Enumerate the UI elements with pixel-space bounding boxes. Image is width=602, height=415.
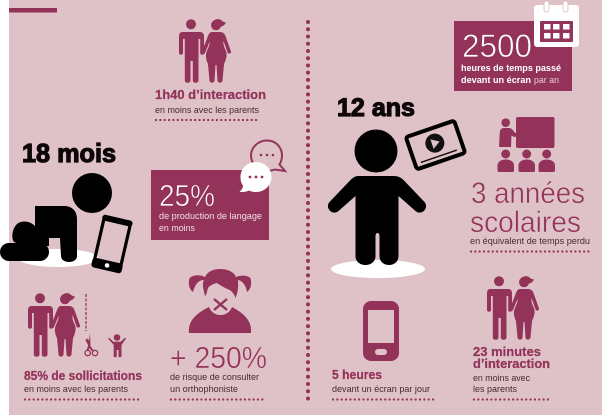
- icon: speech bubbles: [240, 140, 285, 192]
- stat: 1h40 interaction: en moins avec les parents: [155, 105, 259, 116]
- stat: +250% speech therapist: [170, 269, 267, 400]
- heading: 12 ans: 12 ans: [337, 94, 415, 122]
- stat: 3 school years: scolaires: [470, 206, 581, 239]
- stat: 85% solicitations: en moins avec les parents: [24, 384, 128, 395]
- panel: 25% language production: en moins: [159, 223, 195, 234]
- stat: 23 minutes: d’interaction: [473, 356, 550, 371]
- icon: couple: [487, 276, 539, 340]
- stat: 3 school years: en équivalent de temps perdu: [470, 236, 590, 247]
- stat: +250% speech therapist: un orthophoniste: [170, 384, 238, 395]
- icon: calendar: [534, 1, 579, 47]
- icon: phone: [363, 301, 399, 361]
- accent bar: [9, 8, 57, 12]
- panel: 2500 hours: heures de temps passé: [461, 63, 561, 74]
- icon: smartphone: [91, 214, 133, 274]
- panel: 2500 hours: par an: [534, 75, 559, 86]
- icon: tablet with play button: [406, 121, 465, 169]
- stat: 85% solicitations: [24, 293, 142, 400]
- stat: 3 school years: 3 années: [471, 177, 585, 210]
- panel: 2500 hours: [454, 21, 572, 91]
- icon: silenced girl: [189, 269, 251, 333]
- stat: 3 school years: [470, 117, 590, 252]
- panel: 2500 hours: 2500: [462, 28, 532, 64]
- center dotted divider: [306, 22, 310, 400]
- icon: couple: [179, 19, 231, 83]
- panel: 2500 hours: devant un écran: [461, 75, 531, 86]
- stat: 1h40 interaction: [155, 19, 266, 120]
- stat: 5 hours: [332, 301, 436, 400]
- panel: 25% language production: [151, 170, 269, 240]
- icon: dashed cut line: [85, 294, 87, 331]
- icon: scissors: [85, 333, 98, 356]
- stat: 23 minutes: les parents: [473, 384, 517, 395]
- heading: 18 mois: 18 mois: [22, 138, 116, 168]
- stat: +250% speech therapist: de risque de consulter: [170, 372, 259, 383]
- illustration: crawling baby with phone: [0, 173, 133, 274]
- stat: 23 minutes: en moins avec: [473, 373, 530, 384]
- icon: classroom: [498, 117, 555, 172]
- illustration: standing child: [328, 130, 426, 278]
- stat: +250% speech therapist: + 250%: [170, 340, 267, 375]
- icon: child: [108, 334, 126, 357]
- stat: 5 hours: 5 heures: [332, 367, 382, 382]
- panel: 25% language production: de production de langage: [159, 211, 262, 222]
- stat: 23 minutes: [473, 276, 551, 400]
- stat: 5 hours: devant un écran par jour: [332, 384, 430, 395]
- stat: 85% solicitations: 85% de sollicitations: [24, 368, 142, 383]
- icon: couple: [28, 293, 80, 357]
- panel: 25% language production: 25%: [159, 178, 215, 213]
- stat: 1h40 interaction: 1h40 d’interaction: [155, 87, 266, 102]
- stat: 23 minutes: 23 minutes: [473, 344, 541, 359]
